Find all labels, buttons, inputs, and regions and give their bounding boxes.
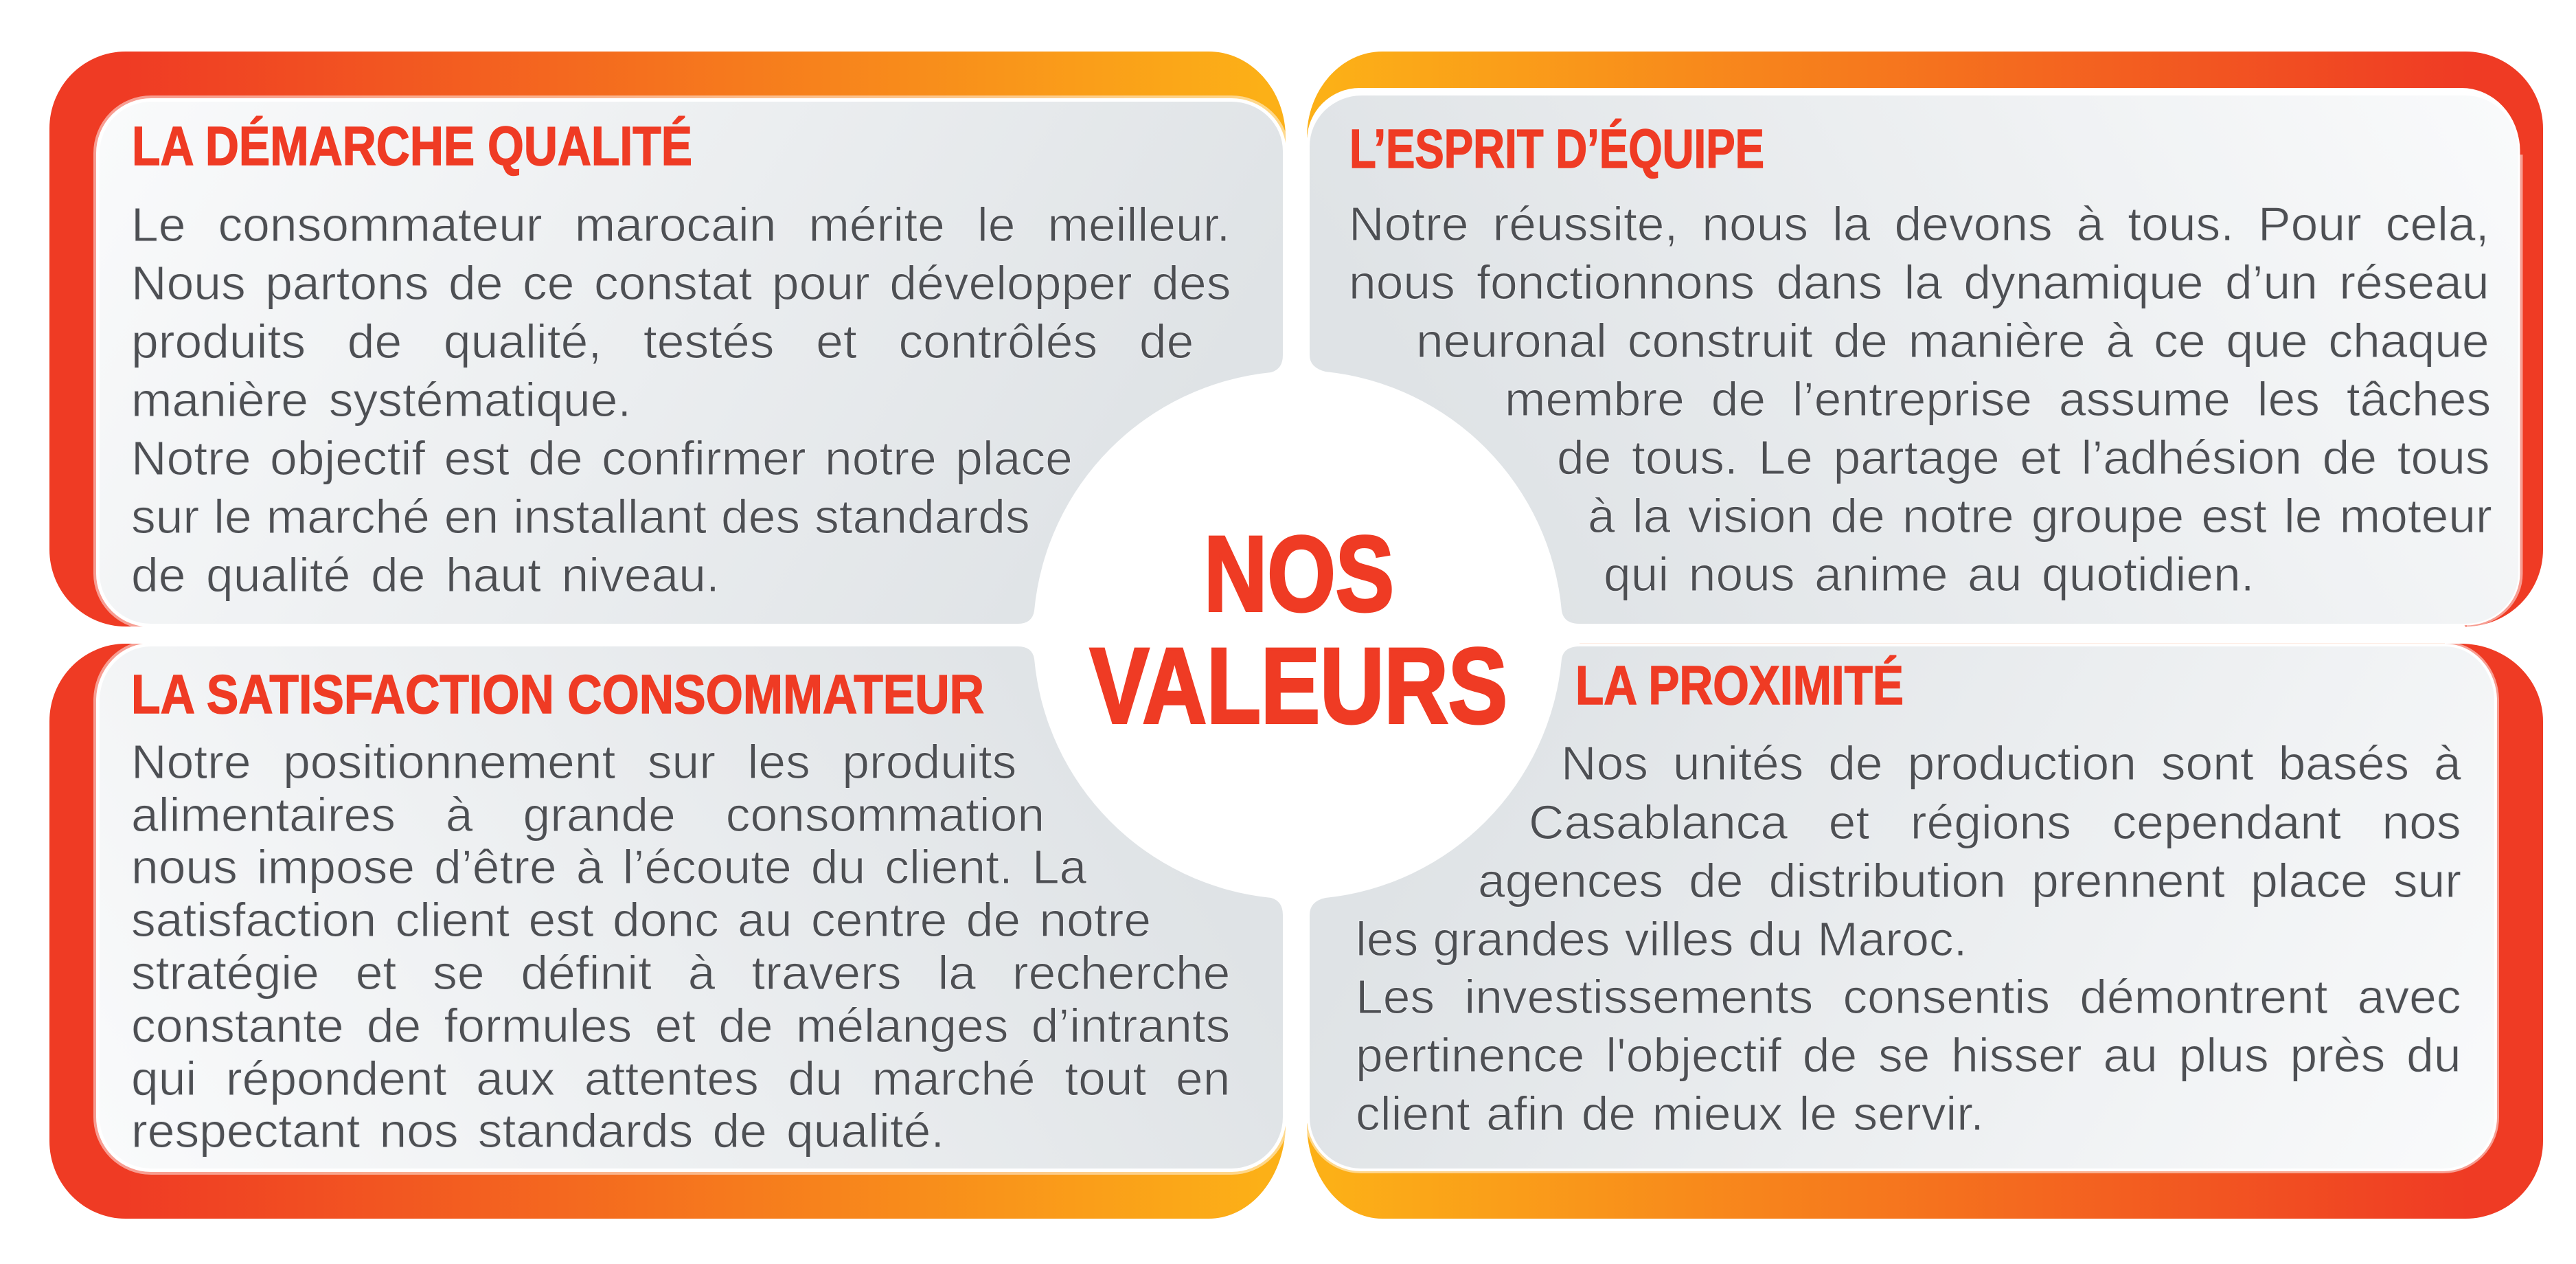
panel: l'esprit d'équipe — [1307, 52, 2543, 627]
body text: Les investissements consentis démontrent avec — [1356, 970, 2461, 1024]
body text: respectant nos standards de qualité. — [131, 1104, 944, 1158]
body text: qui répondent aux attentes du marché tout en — [131, 1052, 1230, 1105]
body text: Nous partons de ce constat pour développer des — [131, 256, 1231, 310]
body text: de qualité de haut niveau. — [131, 548, 720, 602]
body text: constante de formules et de mélanges d’intrants — [131, 999, 1230, 1052]
body text: Casablanca et régions cependant nos — [1529, 795, 2461, 849]
body text: à la vision de notre groupe est le moteur — [1588, 489, 2492, 543]
body text: pertinence l'objectif de se hisser au plus près du — [1356, 1028, 2461, 1082]
gradient band — [49, 52, 1286, 627]
grey card with white and tinted outline — [100, 646, 1283, 1169]
heading: LA PROXIMITÉ — [1575, 655, 1904, 716]
grey card with white and tinted outline — [1307, 88, 2521, 625]
body text: qui nous anime au quotidien. — [1604, 548, 2255, 601]
gradient band — [49, 644, 1286, 1219]
grey card with white and tinted outline — [100, 102, 1283, 624]
title — [1090, 529, 1507, 728]
body text: neuronal construit de manière à ce que chaque — [1416, 314, 2489, 368]
title: VALEURS — [1090, 627, 1507, 746]
panel: la proximité — [1307, 644, 2543, 1219]
body text — [131, 735, 1230, 1158]
body text: Notre objectif est de confirmer notre place — [131, 431, 1073, 485]
body text — [1356, 736, 2461, 1141]
body text: Nos unités de production sont basés à — [1561, 736, 2461, 790]
heading: LA DÉMARCHE QUALITÉ — [132, 115, 692, 177]
grey card with white and tinted outline — [1310, 646, 2494, 1169]
gradient band — [1307, 644, 2543, 1219]
body text: alimentaires à grande consommation — [131, 788, 1045, 842]
body text: satisfaction client est donc au centre de notre — [131, 893, 1151, 947]
body text: Notre réussite, nous la devons à tous. Pour cela, — [1349, 197, 2489, 251]
body text: Notre positionnement sur les produits — [131, 735, 1016, 789]
body text: stratégie et se définit à travers la recherche — [131, 946, 1230, 1000]
body text — [131, 198, 1231, 602]
panel: la démarche qualité — [49, 52, 1286, 627]
body text: client afin de mieux le servir. — [1356, 1087, 1984, 1140]
body text: agences de distribution prennent place sur — [1478, 854, 2461, 907]
body text: de tous. Le partage et l’adhésion de tous — [1557, 431, 2490, 484]
heading: L’ESPRIT D’ÉQUIPE — [1349, 118, 1764, 179]
body text: Le consommateur marocain mérite le meilleur. — [131, 198, 1230, 251]
title: NOS — [1204, 515, 1394, 634]
panel: la satisfaction consommateur — [49, 644, 1286, 1219]
body text: produits de qualité, testés et contrôlés de — [131, 315, 1194, 368]
body text: manière systématique. — [131, 373, 631, 427]
body text: nous fonctionnons dans la dynamique d’un réseau — [1349, 256, 2489, 309]
body text: sur le marché en installant des standards — [131, 490, 1030, 543]
body text: les grandes villes du Maroc. — [1356, 912, 1967, 966]
body text — [1349, 197, 2492, 601]
gradient band — [1307, 52, 2543, 627]
body text: nous impose d’être à l’écoute du client. La — [131, 840, 1086, 894]
heading: LA SATISFACTION CONSOMMATEUR — [131, 664, 984, 725]
body text: membre de l’entreprise assume les tâches — [1505, 372, 2491, 426]
